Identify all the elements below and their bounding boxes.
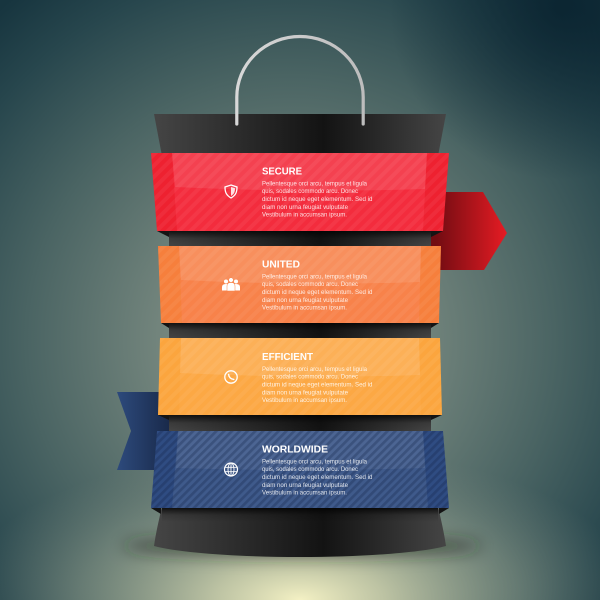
stripes [151, 153, 449, 231]
inner panel [179, 338, 421, 415]
text block [262, 366, 373, 404]
icon: people [222, 278, 240, 291]
blue ribbon tab [117, 392, 172, 470]
text block: Vestibulum in accumsan ipsum. [262, 397, 347, 404]
red arrow tab [431, 192, 507, 270]
heading: WORLDWIDE [262, 444, 328, 456]
text block: dictum id neque eget elementum. Sed id [262, 289, 373, 296]
stripes [158, 338, 442, 415]
bag base [154, 506, 446, 557]
inner panel [179, 246, 421, 323]
bag top [154, 114, 446, 156]
glass highlight [179, 246, 421, 284]
band [151, 153, 449, 231]
text block: quis, sodales commodo arcu. Donec [262, 281, 359, 288]
panel: worldwide [151, 431, 449, 508]
heading: UNITED [262, 258, 300, 270]
heading: EFFICIENT [262, 351, 314, 363]
inner panel [172, 153, 427, 231]
stripes [158, 246, 441, 323]
text block: Vestibulum in accumsan ipsum. [262, 490, 347, 497]
panel: efficient [158, 338, 442, 415]
text block: quis, sodales commodo arcu. Donec [262, 374, 359, 381]
text block: Pellentesque orci arcu, tempus et ligula [262, 366, 367, 373]
band [158, 246, 441, 323]
panel: united [158, 246, 441, 323]
text block [262, 274, 373, 312]
glass highlight [176, 431, 425, 470]
fold shadows [151, 231, 449, 514]
text block: dictum id neque eget elementum. Sed id [262, 474, 373, 481]
text block: Pellentesque orci arcu, tempus et ligula [262, 274, 367, 280]
inner panel [172, 431, 428, 508]
text block: Pellentesque orci arcu, tempus et ligula [262, 458, 367, 466]
text block [262, 458, 373, 497]
panel: secure [151, 153, 449, 231]
stripes [151, 431, 449, 508]
bag body [169, 156, 431, 516]
text block: quis, sodales commodo arcu. Donec [262, 466, 359, 473]
text block [262, 180, 373, 219]
text block: Pellentesque orci arcu, tempus et ligula [262, 180, 367, 188]
text block: diam non urna feugiat vulputate [262, 482, 348, 489]
icon: clock [225, 371, 237, 383]
text block: diam non urna feugiat vulputate [262, 390, 348, 396]
glass highlight [180, 338, 420, 377]
body shadow strips [162, 231, 438, 522]
bag handle [237, 36, 363, 124]
text block: Vestibulum in accumsan ipsum. [262, 305, 347, 312]
icon: globe [224, 463, 238, 476]
text block: diam non urna feugiat vulputate [262, 297, 348, 304]
ground shadow [122, 535, 482, 557]
band [158, 338, 442, 415]
text block: Vestibulum in accumsan ipsum. [262, 212, 347, 219]
heading: SECURE [262, 166, 302, 178]
band [151, 431, 449, 508]
text block: dictum id neque eget elementum. Sed id [262, 196, 373, 203]
text block: dictum id neque eget elementum. Sed id [262, 382, 373, 388]
text block: diam non urna feugiat vulputate [262, 204, 348, 211]
shopping bag [154, 36, 446, 557]
icon: shield [225, 185, 237, 198]
text block: quis, sodales commodo arcu. Donec [262, 188, 359, 195]
glass highlight [172, 153, 427, 191]
